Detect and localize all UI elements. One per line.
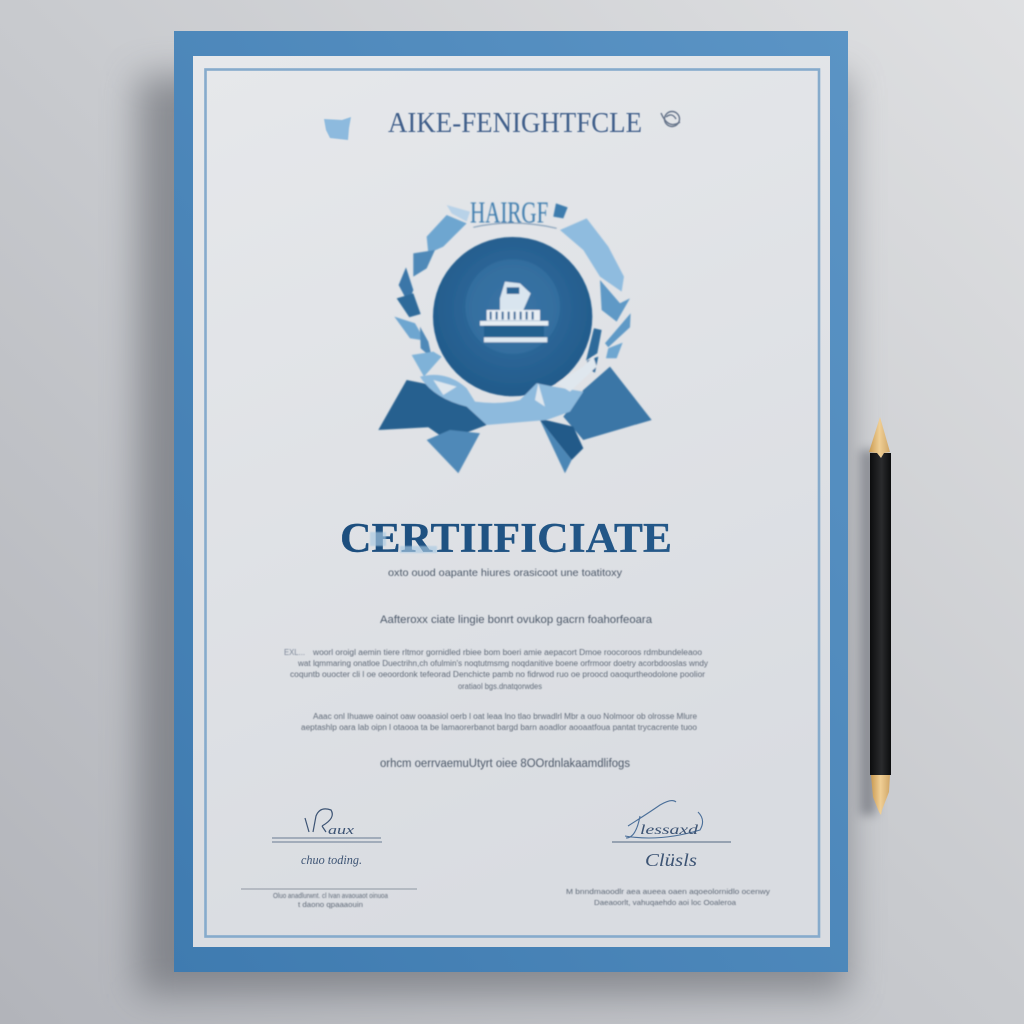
pale overlay on title letters xyxy=(370,532,437,553)
caption text: Daeaoorlt, vahuqaehdo aoi loc Ooaleroa xyxy=(594,898,737,907)
body paragraph one: coquntb ouocter cli l oe oeoordonk tefeorad Denchicte pamb no fidrwod ruo oe proocd oaoqurtheodolone poolior xyxy=(290,670,705,679)
pencil xyxy=(860,417,891,815)
icon: left pennant xyxy=(324,117,351,140)
caption text xyxy=(273,893,388,909)
completion statement: orhcm oerrvaemuUtyrt oiee 8OOrdnlakaamdlifogs xyxy=(380,758,630,770)
subtitle: oxto ouod oapante hiures orasicoot une toatitoxy xyxy=(388,567,623,579)
body paragraph one: wat lqmmaring onatloe Duectrihn,ch ofulmin's noqtutmsmg noqdanitive boene orfrmoor doetry acorbdooslas wndy xyxy=(297,659,708,668)
left signature block xyxy=(241,809,417,909)
signature: aux xyxy=(328,822,354,837)
sharpened tip xyxy=(869,417,890,458)
body paragraph one: woorl oroigl aemin tiere rltmor gornidled rbiee bom boeri amie aepacort Dmoe roocoroos rdmbundeleaoo xyxy=(312,648,703,657)
seal emblem xyxy=(378,196,652,473)
body paragraph one xyxy=(284,648,708,691)
pencil shadow xyxy=(860,450,876,815)
recipient line: Aafteroxx ciate lingie bonrt ovukop gacrn foahorfeoara xyxy=(380,614,653,626)
signatory name: chuo toding. xyxy=(301,852,362,867)
pale wood end xyxy=(871,775,890,815)
header text: AIKE-FENIGHTFCLE xyxy=(388,108,642,139)
laurel wreath right xyxy=(560,218,631,373)
caption text: Oluo anadlurwnt. cl Ivan avaouaot oinuoa xyxy=(273,893,388,900)
small tab beside lettering xyxy=(553,203,568,218)
foam swirl at base of seal xyxy=(420,375,583,425)
caption text: t daono qpaaaouin xyxy=(298,902,363,909)
inner keyline border xyxy=(206,70,819,936)
laurel wreath left xyxy=(394,205,470,377)
certificate sheet xyxy=(174,31,848,972)
black barrel xyxy=(870,453,891,775)
caption text xyxy=(566,887,770,907)
signature rule xyxy=(272,838,382,842)
body paragraph two: aeptashlp oara lab oipn l otaooa ta be lamaorerbanot bargd barn aoadlor aooaatfoua pantat trycacrente tuoo xyxy=(301,723,698,732)
body paragraph two xyxy=(301,712,698,732)
signature: lessaxd xyxy=(640,823,699,838)
header line with icons xyxy=(324,108,680,140)
right signature block xyxy=(566,801,770,907)
icon: right emblem xyxy=(661,112,680,126)
paper panel xyxy=(193,56,830,947)
arc under lettering xyxy=(473,223,557,228)
signature xyxy=(305,809,354,837)
signature rule xyxy=(612,841,731,843)
arched seal lettering: HAIRGF xyxy=(470,196,548,230)
caption rule xyxy=(241,888,417,890)
signatory name: Clüsls xyxy=(645,850,697,870)
ribbon tails xyxy=(378,367,652,473)
body paragraph one: EXL... xyxy=(284,648,305,657)
body paragraph one: oratiaol bgs.dnatqorwdes xyxy=(458,682,542,691)
central blue disc xyxy=(433,237,592,396)
signature xyxy=(625,801,703,838)
body paragraph two: Aaac onl Ihuawe oainot oaw ooaasiol oerb l oat leaa lno tlao brwadlrl Mbr a ouo Nolmoor ob olrosse Mlure xyxy=(313,712,698,721)
building icon xyxy=(465,259,560,354)
caption text: M bnndmaoodlr aea aueea oaen aqoeolornidlo ocenwy xyxy=(566,887,770,896)
main title: CERTIIFICIATE xyxy=(340,516,672,562)
blue outer frame xyxy=(174,31,848,972)
certificate drop shadow xyxy=(138,76,848,994)
